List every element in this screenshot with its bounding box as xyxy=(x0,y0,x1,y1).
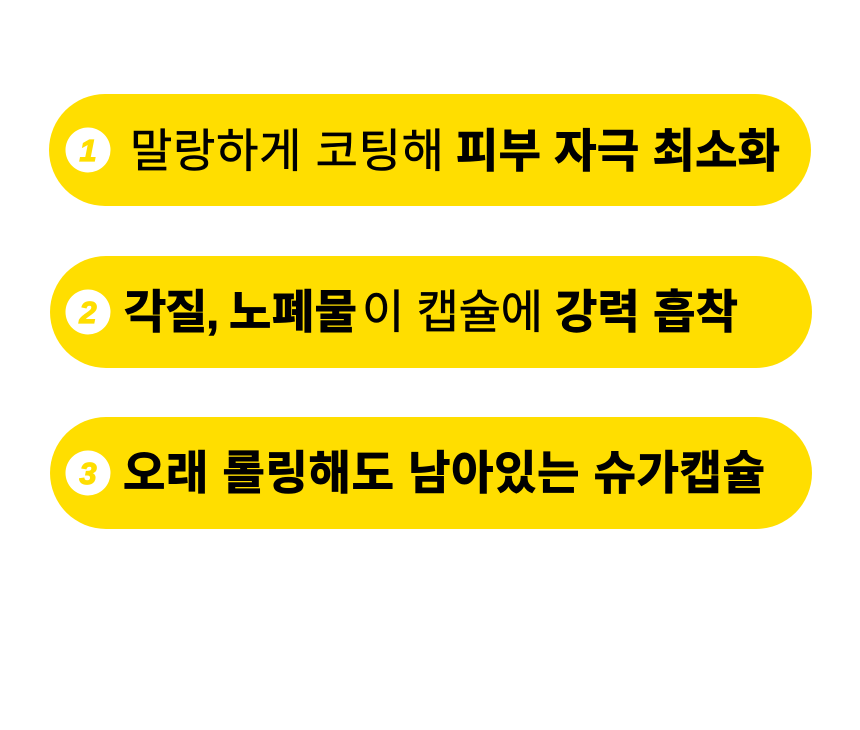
text: feature 1 headline: 피부 자극 최소화 xyxy=(456,125,780,177)
text: feature 2 headline: 이 캡슐에 xyxy=(362,286,543,338)
icon: number 1 badge xyxy=(66,128,110,172)
text: feature 2 headline: 각질, xyxy=(124,286,219,338)
text: feature 2 headline: 노폐물 xyxy=(229,286,357,338)
icon: number 2 badge: 2 xyxy=(78,295,97,330)
icon: number 2 badge xyxy=(66,290,110,334)
text: feature 2 headline xyxy=(124,286,738,338)
panel: feature 3 xyxy=(50,417,812,529)
icon: number 3 badge xyxy=(66,450,110,496)
panel: feature 2 xyxy=(50,256,812,368)
text: feature 1 headline: 말랑하게 코팅해 xyxy=(130,125,444,177)
icon: number 1 badge: 1 xyxy=(79,133,97,168)
icon: number 3 badge: 3 xyxy=(79,456,97,491)
text: feature 3 headline: 오래 롤링해도 남아있는 슈가캡슐 xyxy=(123,447,765,499)
text: feature 1 headline xyxy=(130,125,780,177)
text: feature 2 headline: 강력 흡착 xyxy=(555,286,738,338)
panel: feature 1 xyxy=(49,94,811,206)
